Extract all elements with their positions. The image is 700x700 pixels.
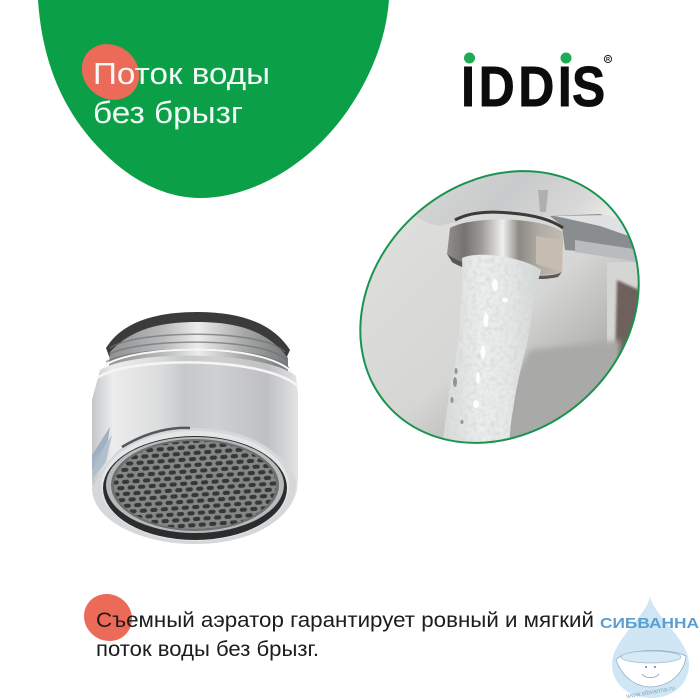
chrome body	[92, 356, 298, 542]
front bezel	[92, 428, 296, 544]
logo: IDDIS: IDDIS	[461, 56, 605, 119]
photo: water stream from faucet	[359, 170, 640, 444]
threaded neck	[108, 322, 288, 385]
heading: без брызг	[93, 95, 243, 130]
faucet spout	[416, 172, 618, 226]
product: aerator	[92, 312, 298, 544]
watermark: Sibvanna: СИБВАННА	[600, 615, 699, 632]
caption: Съемный аэратор гарантирует ровный и мягкий	[96, 609, 594, 632]
caption accent blob	[75, 585, 141, 650]
photo outline	[305, 115, 694, 499]
heading accent blob	[71, 33, 150, 111]
logo: IDDIS: R	[606, 57, 610, 63]
aerator ring	[447, 219, 563, 275]
black gasket	[106, 312, 290, 372]
green header blob	[38, 0, 389, 198]
wall corner	[607, 262, 638, 344]
watermark: Sibvanna	[600, 597, 699, 700]
water stream	[442, 255, 541, 450]
heading: Поток воды	[93, 56, 270, 91]
watermark: Sibvanna: www.sibvanna.ru	[625, 685, 676, 700]
caption: поток воды без брызг.	[96, 638, 319, 661]
honeycomb mesh	[114, 441, 276, 529]
